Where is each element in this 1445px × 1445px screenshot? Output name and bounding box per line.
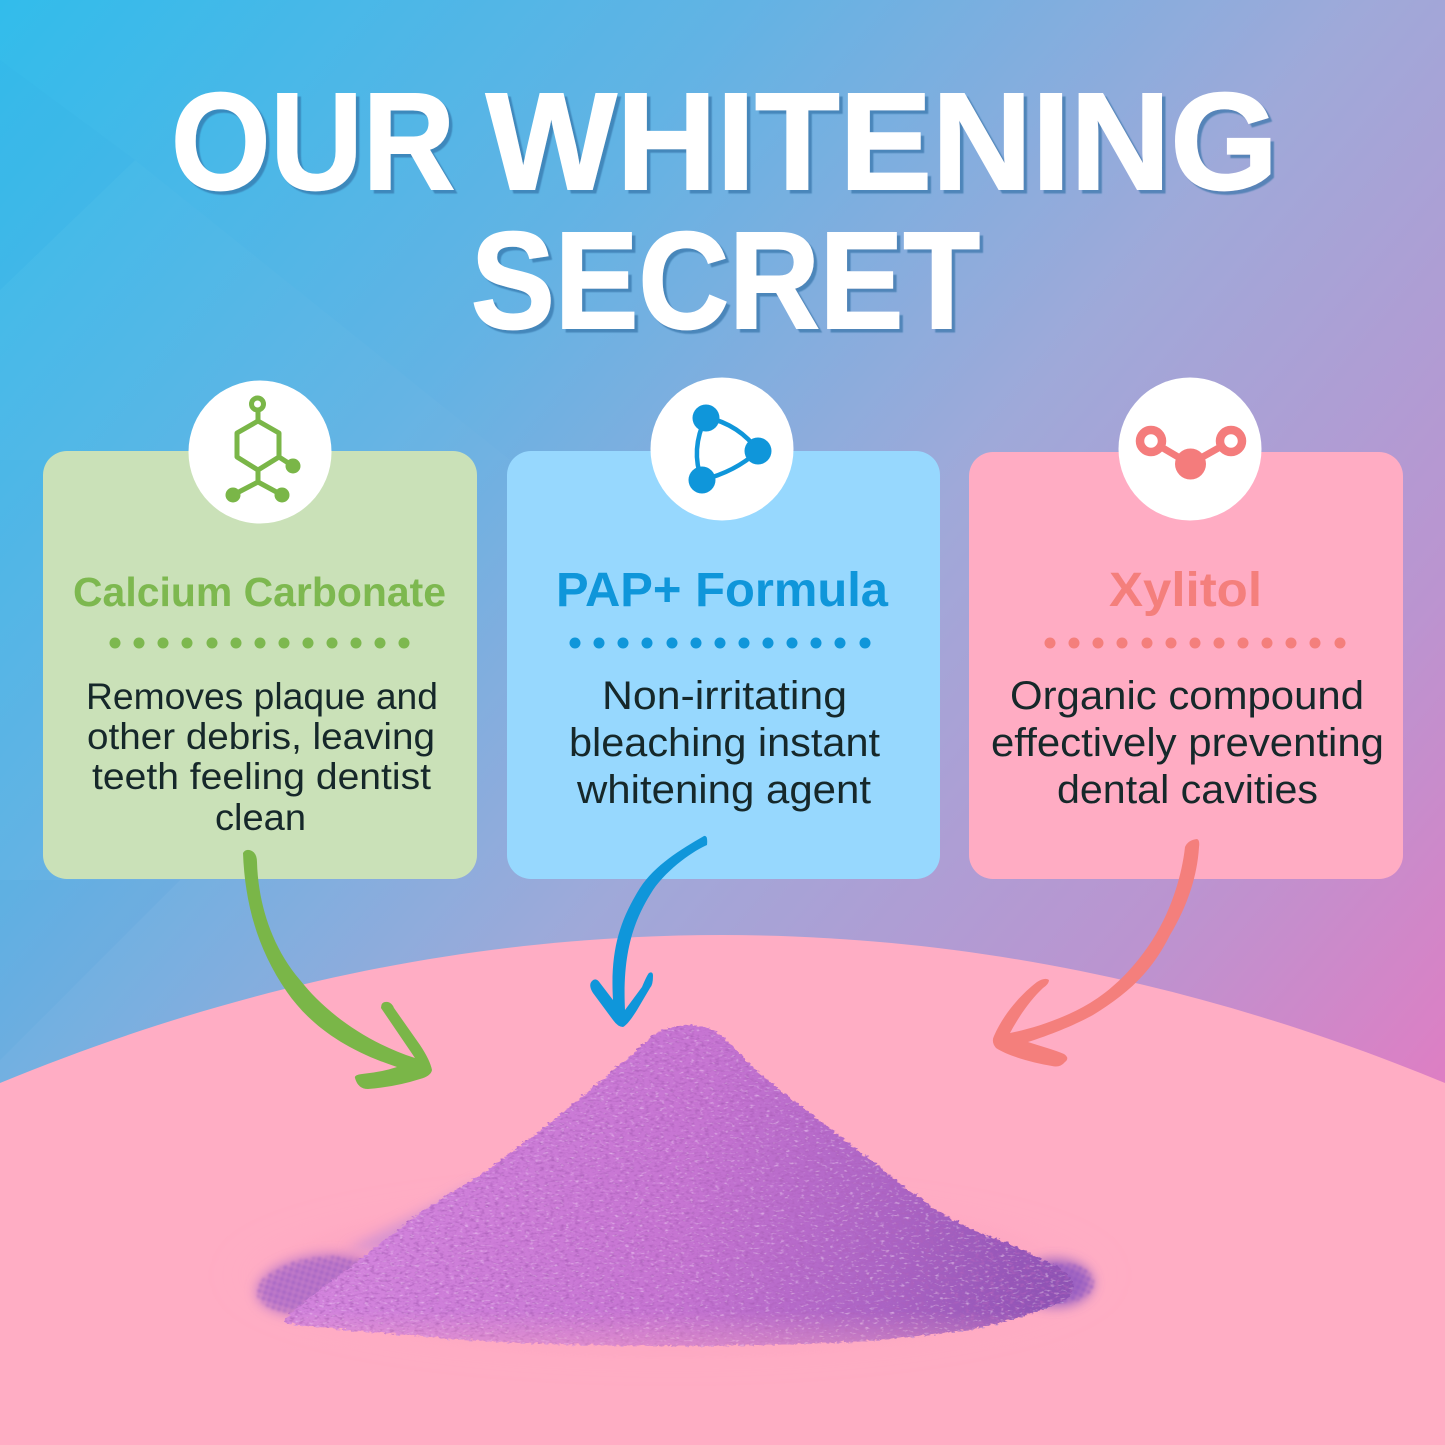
- text block: calcium carbonate description: teeth feeling dentist: [92, 756, 432, 797]
- icon: three node chain: [1118, 378, 1262, 520]
- panel: pap+ formula: [507, 451, 940, 879]
- text block: xylitol description: dental cavities: [1057, 768, 1318, 812]
- dotted divider: blue: [570, 638, 870, 648]
- text block: pap+ description: whitening agent: [576, 768, 871, 812]
- text block: xylitol description: Organic compound: [1010, 674, 1364, 718]
- heading: xylitol: Xylitol: [1109, 564, 1262, 617]
- icon: triangle network: [650, 378, 794, 520]
- dotted divider: green: [110, 638, 410, 648]
- title: OUR: [171, 65, 455, 219]
- text block: xylitol description: [991, 674, 1384, 812]
- powder fuzz: left: [252, 1180, 480, 1323]
- text block: calcium carbonate description: Removes plaque and: [86, 676, 438, 717]
- panel: calcium carbonate: [43, 451, 477, 879]
- text block: pap+ description: bleaching instant: [569, 721, 880, 765]
- icon: molecule hexagon: [188, 380, 332, 524]
- powder fuzz: right: [1017, 1259, 1094, 1307]
- powder base fade: [280, 1024, 1080, 1350]
- text block: pap+ description: [569, 674, 880, 812]
- pink ground: [0, 935, 1445, 1445]
- title: WHITENING: [486, 65, 1278, 219]
- heading: pap+ formula: PAP+ Formula: [556, 564, 888, 617]
- dotted divider: red: [1044, 638, 1346, 648]
- panel: xylitol: [969, 452, 1403, 879]
- heading: calcium carbonate: Calcium Carbonate: [73, 569, 446, 615]
- text block: calcium carbonate description: clean: [215, 797, 306, 838]
- text block: calcium carbonate description: other debris, leaving: [87, 716, 435, 757]
- arrow: blue to powder: [590, 836, 707, 1027]
- text block: pap+ description: Non-irritating: [602, 674, 847, 718]
- text block: calcium carbonate description: [86, 676, 438, 838]
- arrow: red to powder: [993, 839, 1199, 1066]
- title: [171, 65, 1278, 358]
- text block: xylitol description: effectively preventing: [991, 721, 1384, 765]
- powder cone: [284, 1025, 1074, 1346]
- powder pile: [225, 1024, 1115, 1360]
- arrow: green to powder: [243, 850, 432, 1089]
- title: SECRET: [471, 204, 980, 358]
